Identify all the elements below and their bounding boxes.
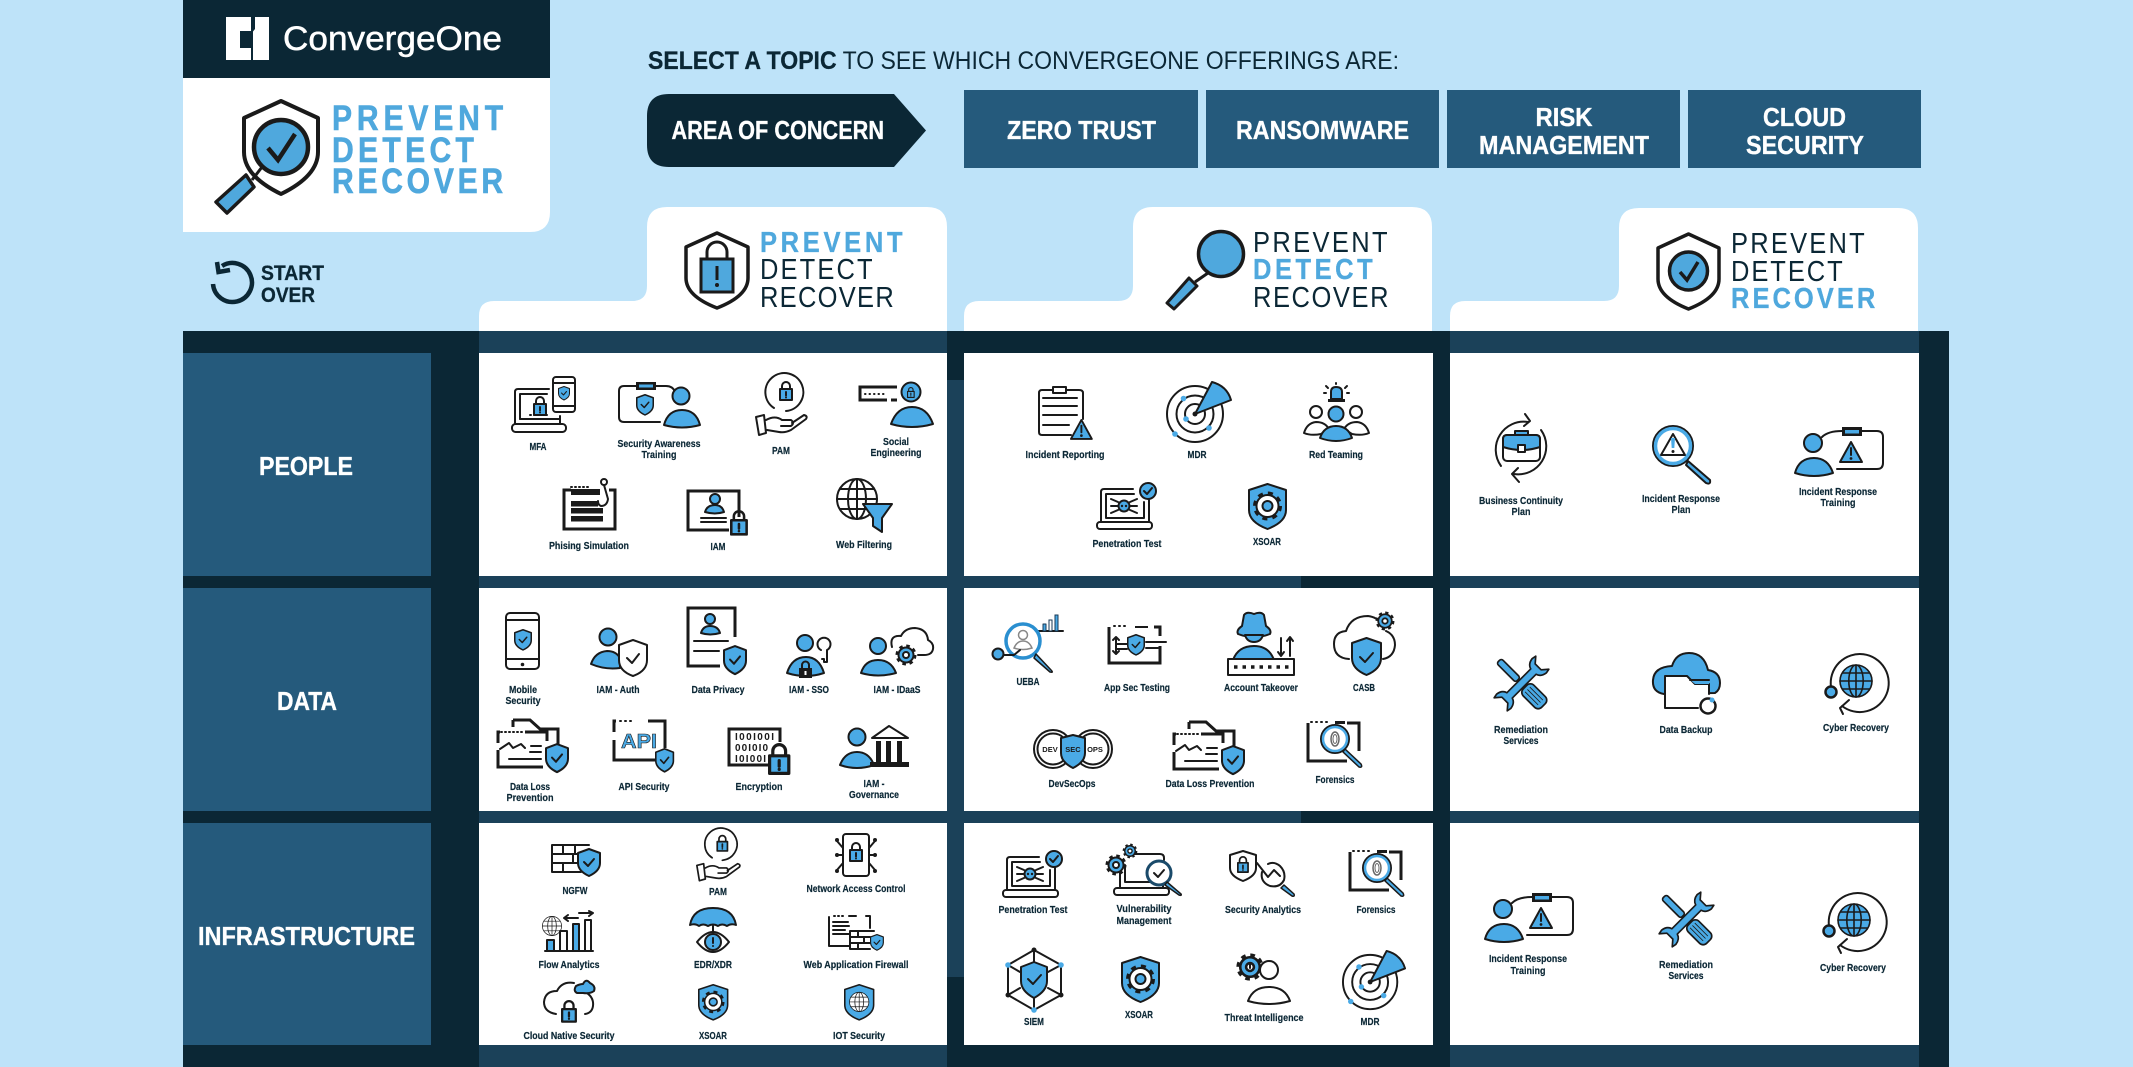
item: remediation services	[1659, 892, 1714, 982]
item: flow analytics	[538, 911, 600, 971]
item: incident response plan: Incident Response	[1642, 493, 1720, 505]
item: incident response training	[1485, 893, 1573, 977]
panel: data recover	[1450, 588, 1919, 811]
panel: infrastructure detect	[964, 823, 1433, 1045]
button: risk management: RISK	[1536, 102, 1593, 132]
item: business continuity plan	[1479, 414, 1563, 518]
words: RECOVER	[1731, 281, 1876, 314]
item: remediation services	[1494, 656, 1549, 747]
item: incident response training: Training	[1510, 965, 1546, 977]
button: zero trust	[964, 90, 1198, 168]
item: cyber recovery	[1820, 893, 1887, 974]
panel: people recover	[1450, 353, 1919, 576]
item: network access control: Network Access Control	[806, 883, 906, 895]
column tab: detect	[964, 207, 1432, 331]
label: start over: OVER	[261, 284, 315, 307]
item: incident response plan: Plan	[1672, 504, 1690, 516]
item: PAM	[697, 828, 740, 898]
panel: people prevent	[479, 353, 947, 576]
item: security analytics: Security Analytics	[1225, 904, 1301, 916]
item: vulnerability management: Vulnerability	[1116, 903, 1172, 915]
item: forensics	[1308, 721, 1362, 786]
item: MDR	[1167, 382, 1231, 461]
item: SIEM	[1005, 948, 1064, 1028]
item: data loss prevention	[498, 720, 568, 804]
item: threat intelligence: Threat Intelligence	[1224, 1012, 1304, 1024]
item: cyber recovery: Cyber Recovery	[1823, 722, 1889, 734]
item: XSOAR	[1122, 957, 1159, 1021]
item: data loss prevention: Prevention	[506, 792, 554, 804]
item: IOT security	[833, 985, 885, 1042]
arrow button: area of concern: AREA OF CONCERN	[672, 115, 884, 145]
row label: people: PEOPLE	[259, 451, 353, 481]
item: MDR: MDR	[1188, 449, 1207, 461]
item: data loss prevention: Data Loss	[510, 781, 550, 793]
button: risk management: MANAGEMENT	[1479, 130, 1649, 160]
item: incident response training: Incident Response	[1799, 486, 1877, 498]
row label: infrastructure: INFRASTRUCTURE	[198, 921, 415, 951]
item: encryption	[729, 729, 789, 793]
item: web filtering	[836, 479, 892, 551]
icon: shield check	[1658, 234, 1719, 309]
item: penetration test: Penetration Test	[1092, 538, 1162, 550]
item: remediation services: Remediation	[1494, 724, 1548, 736]
item: security awareness training	[618, 382, 701, 461]
label: start over: START	[261, 262, 324, 285]
item: NGFW	[552, 845, 600, 897]
item: cloud native security	[524, 981, 615, 1042]
item: data loss prevention: Data Loss Prevention	[1166, 778, 1254, 790]
item: NGFW: NGFW	[562, 885, 588, 897]
item: forensics: Forensics	[1356, 904, 1396, 916]
item: IAM	[688, 491, 747, 553]
item: XSOAR	[699, 985, 728, 1042]
item: IAM governance: Governance	[849, 789, 899, 801]
icon: restart arrow	[213, 262, 252, 302]
item: red teaming: Red Teaming	[1309, 449, 1363, 461]
item: XSOAR	[1249, 484, 1286, 548]
item: MDR: MDR	[1360, 1016, 1380, 1028]
item: forensics: Forensics	[1316, 774, 1355, 786]
item: IAM SSO: IAM - SSO	[789, 684, 829, 696]
button: risk management	[1447, 90, 1680, 168]
item: incident response training	[1795, 427, 1883, 509]
item: flow analytics: Flow Analytics	[538, 959, 600, 971]
item: MFA	[512, 377, 575, 453]
item: business continuity plan: Plan	[1512, 506, 1530, 518]
words: PREVENT	[1253, 225, 1388, 258]
item: PAM	[756, 373, 807, 457]
heading words: RECOVER	[332, 161, 503, 201]
words: PREVENT	[1731, 226, 1865, 259]
button: ransomware	[1206, 90, 1439, 168]
row label: data	[183, 588, 431, 811]
item: web filtering: Web Filtering	[836, 539, 892, 551]
topic prompt: SELECT A TOPIC TO SEE WHICH CONVERGEONE OFFERINGS ARE:	[648, 47, 1399, 75]
item: account takeover: Account Takeover	[1224, 682, 1298, 694]
heading words: PREVENT	[332, 98, 503, 138]
icon: ConvergeOne mark	[226, 17, 269, 60]
item: IAM: IAM	[710, 541, 726, 553]
item: penetration test: Penetration Test	[998, 904, 1068, 916]
words: DETECT	[1731, 254, 1843, 287]
item: remediation services: Services	[1504, 735, 1539, 747]
item: social engineering: Engineering	[870, 447, 922, 459]
item: mobile security: Mobile	[509, 684, 537, 696]
item: mobile security: Security	[506, 695, 541, 707]
item: API security: API Security	[618, 781, 670, 793]
matrix frame	[183, 331, 1949, 1067]
panel: data detect	[964, 588, 1433, 811]
row label: people	[183, 353, 431, 576]
item: network access control	[806, 834, 906, 895]
item: data privacy: Data Privacy	[692, 684, 745, 696]
item: mobile security	[506, 613, 541, 707]
column tab: prevent	[479, 207, 947, 331]
item: IAM governance: IAM -	[864, 778, 885, 790]
item: DevSecOps	[1034, 730, 1112, 790]
words: PREVENT	[760, 225, 903, 258]
item: incident response plan	[1642, 426, 1720, 516]
words: RECOVER	[760, 280, 894, 313]
panel: people detect	[964, 353, 1433, 576]
item: PAM: PAM	[772, 445, 790, 457]
heading words	[332, 98, 503, 201]
item: DevSecOps: DevSecOps	[1048, 778, 1096, 790]
item: API security	[614, 721, 673, 793]
icon: magnifier	[1167, 232, 1244, 309]
item: threat intelligence	[1224, 956, 1304, 1024]
button: zero trust: ZERO TRUST	[1007, 115, 1156, 145]
icon: shield with magnifier	[216, 101, 318, 213]
item: penetration test	[1092, 483, 1162, 550]
item: incident response training: Incident Response	[1489, 953, 1567, 965]
words	[760, 225, 903, 313]
item: security awareness training: Training	[642, 449, 676, 461]
label: start over	[261, 262, 324, 307]
item: IAM auth: IAM - Auth	[596, 684, 640, 696]
item: incident reporting: Incident Reporting	[1026, 449, 1104, 461]
item: app sec testing: App Sec Testing	[1104, 682, 1170, 694]
item: cyber recovery: Cyber Recovery	[1820, 962, 1886, 974]
item: cyber recovery	[1823, 654, 1889, 734]
item: EDR XDR: EDR/XDR	[694, 959, 732, 971]
panel: infrastructure prevent	[479, 823, 947, 1045]
main prevent detect recover card	[183, 78, 550, 232]
panel: data prevent	[479, 588, 947, 811]
button: cloud security: CLOUD	[1763, 102, 1846, 132]
button: cloud security: SECURITY	[1746, 130, 1864, 160]
item: IAM IDaaS: IAM - IDaaS	[874, 684, 920, 696]
item: remediation services: Services	[1668, 970, 1704, 982]
item: PAM: PAM	[709, 886, 727, 898]
item: MFA: MFA	[530, 441, 547, 453]
item: data loss prevention	[1166, 722, 1254, 790]
item: incident response training: Training	[1820, 497, 1856, 509]
row label: data: DATA	[277, 686, 337, 716]
panel: infrastructure recover	[1450, 823, 1919, 1045]
item: encryption: Encryption	[736, 781, 782, 793]
item: business continuity plan: Business Continuity	[1479, 495, 1563, 507]
item: MDR	[1343, 951, 1405, 1028]
item: XSOAR: XSOAR	[1253, 536, 1281, 548]
item: app sec testing	[1104, 626, 1170, 694]
item: IAM SSO	[787, 635, 830, 696]
item: data backup: Data Backup	[1660, 724, 1712, 736]
words: DETECT	[760, 252, 873, 285]
row label: infrastructure	[183, 823, 431, 1045]
item: data backup	[1653, 653, 1720, 736]
item: CASB	[1334, 613, 1395, 694]
start over	[213, 262, 324, 307]
item: phishing simulation	[549, 479, 629, 552]
item: penetration test	[998, 851, 1068, 916]
item: IAM governance	[840, 726, 909, 801]
button: cloud security	[1688, 90, 1921, 168]
button: ransomware: RANSOMWARE	[1236, 115, 1409, 145]
item: data privacy	[688, 608, 746, 696]
words: DETECT	[1253, 252, 1373, 285]
item: IAM IDaaS	[861, 628, 933, 696]
item: web application firewall	[804, 916, 909, 971]
words: RECOVER	[1253, 280, 1389, 313]
item: CASB: CASB	[1353, 682, 1375, 694]
words	[1253, 225, 1389, 313]
item: EDR XDR	[690, 908, 736, 971]
heading words: DETECT	[332, 130, 474, 170]
item: social engineering: Social	[883, 436, 909, 448]
item: social engineering	[860, 382, 933, 459]
logo header	[183, 0, 550, 78]
item: red teaming	[1304, 383, 1369, 461]
item: IOT security: IOT Security	[833, 1030, 885, 1042]
item: cloud native security: Cloud Native Security	[524, 1030, 615, 1042]
item: security analytics	[1225, 851, 1301, 916]
item: IAM auth	[591, 628, 647, 696]
item: web application firewall: Web Application Firewall	[804, 959, 909, 971]
item: vulnerability management: Management	[1116, 915, 1172, 927]
item: remediation services: Remediation	[1659, 959, 1713, 971]
words	[1731, 226, 1876, 314]
item: XSOAR: XSOAR	[1125, 1009, 1153, 1021]
icon: shield lock	[686, 233, 748, 308]
item: SIEM: SIEM	[1024, 1016, 1044, 1028]
item: security awareness training: Security Awareness	[618, 438, 701, 450]
item: account takeover	[1224, 613, 1298, 694]
column tab: recover	[1450, 208, 1918, 331]
item: vulnerability management	[1108, 845, 1181, 927]
item: incident reporting	[1026, 387, 1104, 461]
arrow button: area of concern	[647, 94, 926, 167]
item: UEBA: UEBA	[1016, 676, 1040, 688]
item: forensics	[1350, 850, 1404, 916]
item: phishing simulation: Phising Simulation	[549, 540, 629, 552]
item: XSOAR: XSOAR	[699, 1030, 727, 1042]
brand name: ConvergeOne	[283, 20, 502, 58]
item: UEBA	[992, 615, 1063, 688]
